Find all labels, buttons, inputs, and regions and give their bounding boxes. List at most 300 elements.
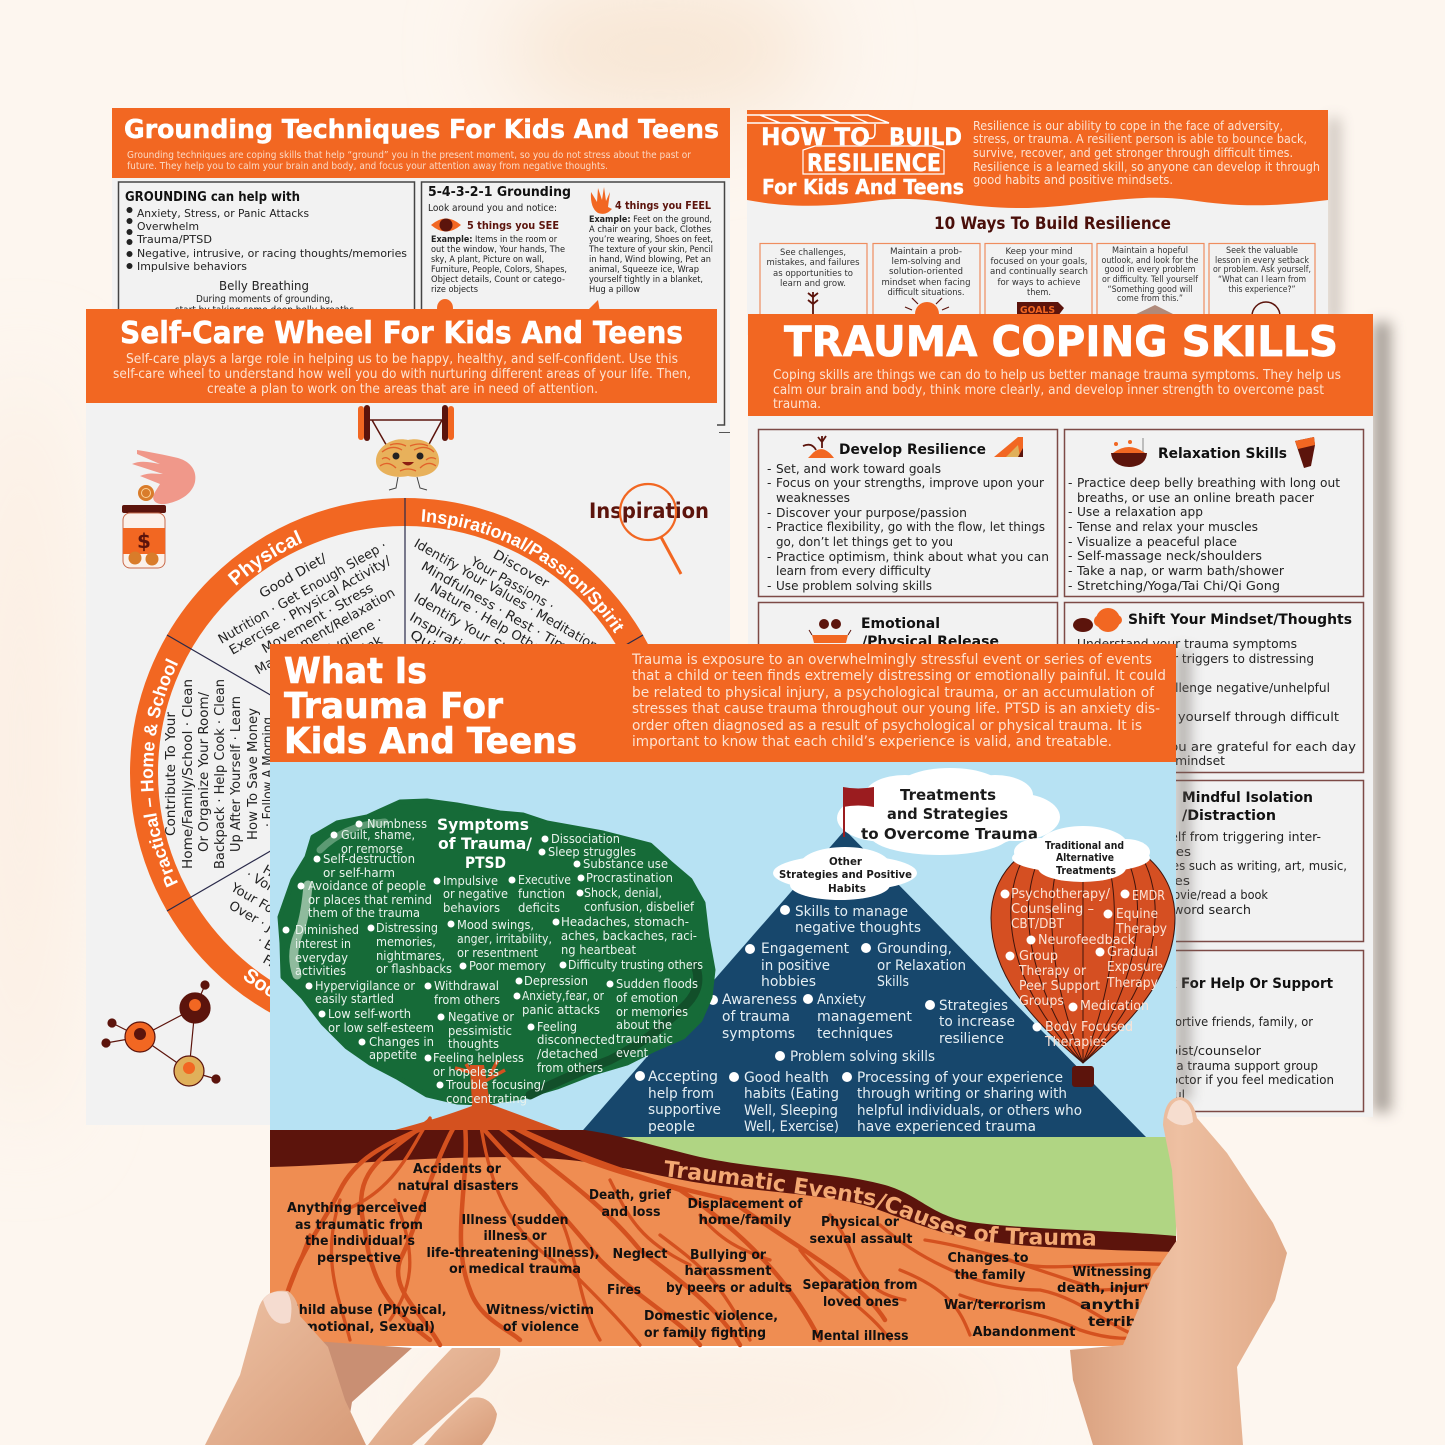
box: grounding can help with: Trauma/PTSD	[136, 233, 212, 246]
box: shift your mindset: Identify and challenge negative/unhelpful	[1077, 681, 1330, 695]
symptoms text: aches, backaches, raci-	[561, 929, 697, 943]
treatments text: Groups	[1019, 994, 1064, 1009]
symptoms text: Self-destruction	[323, 852, 415, 866]
wheel sector text: inspirational: Mindfulness · Rest · Time	[418, 559, 577, 660]
traumatic events list: natural disasters	[398, 1178, 518, 1194]
box: mindful isolation: Focus on activities such as writing, art, music,	[1077, 859, 1347, 873]
icon: hand	[591, 187, 612, 214]
wheel sector text: physical: Good Diet/	[257, 551, 330, 602]
chart: self-care wheel: Social	[244, 969, 270, 997]
box: emotional physical release: Emotional	[861, 616, 940, 632]
traumatic events list: Anything perceived	[287, 1200, 427, 1216]
what is trauma header: Kids And Teens	[284, 721, 577, 762]
strategies text: techniques	[817, 1026, 893, 1042]
strategies text: Anxiety	[817, 992, 866, 1008]
box: 5-4-3-2-1 grounding: 5 things you SEE	[467, 219, 559, 232]
symptoms text: or flashbacks	[376, 962, 452, 976]
chart: self-care wheel: Physical	[228, 530, 302, 586]
traumatic events list: Death, grief	[589, 1187, 671, 1203]
wheel sector text: inspirational	[407, 536, 600, 703]
panel: what is trauma	[270, 643, 1198, 1348]
traumatic events list: or family fighting	[644, 1325, 766, 1341]
what is trauma header: What Is	[284, 651, 427, 692]
strategies text: supportive	[648, 1102, 721, 1118]
symptoms text: activities	[295, 964, 346, 978]
icon: social network	[102, 981, 220, 1086]
wheel sector text: practical: · Follow A Morning	[261, 717, 276, 827]
resilience cards: lesson in every setback	[1215, 255, 1310, 266]
wheel sector text: physical: Exercise · Physical Activity/	[227, 553, 394, 658]
box: ask for help: Consider joining a trauma support group	[1077, 1059, 1318, 1073]
symptoms text: deficits	[518, 901, 560, 915]
traumatic events list: terrible	[1088, 1314, 1152, 1330]
box: shift your mindset: memories	[1077, 666, 1138, 680]
box: develop resilience: Develop Resilience	[839, 442, 986, 458]
symptoms text: or places that remind	[308, 893, 432, 907]
strategies text: Grounding,	[877, 941, 952, 957]
panel: grounding techniques	[112, 108, 730, 1000]
box: relaxation skills: -	[1068, 520, 1072, 534]
symptoms text: Feeling helpless	[433, 1051, 524, 1065]
resilience header: survive, recover, and get stronger through difficult times.	[973, 145, 1293, 160]
symptoms text: or low self-esteem	[328, 1021, 434, 1035]
mountain with strategies	[577, 768, 1146, 1137]
traumatic events list: death, injury or	[1057, 1280, 1173, 1296]
resilience cards: outlook, and look for the	[1102, 255, 1199, 266]
traumatic events list: Bullying or	[690, 1247, 766, 1263]
symptoms text: or hopeless	[433, 1065, 499, 1079]
traumatic events list: Physical or	[821, 1214, 899, 1230]
box: 5-4-3-2-1 grounding: 5-4-3-2-1 Grounding	[428, 185, 571, 200]
box: relaxation skills: -	[1068, 564, 1072, 578]
strategies text: in positive	[761, 958, 830, 974]
box: grounding can help with: During moments of grounding,	[196, 294, 333, 305]
box: 5-4-3-2-1 grounding: The texture of your skin, Pencil	[588, 245, 713, 255]
traumatic events list: Mental illness	[812, 1328, 908, 1344]
box: relaxation skills: -	[1068, 579, 1072, 593]
wheel sector text: inspirational: Identify Your Values · Meditation	[411, 536, 600, 654]
traumatic events list: the individual’s	[305, 1233, 415, 1249]
box: 5-4-3-2-1 grounding: Example: Feet on the ground,	[589, 215, 712, 225]
wheel sector text: physical: Water · Drink	[300, 633, 386, 691]
box: 5-4-3-2-1 grounding: rize objects	[431, 285, 478, 295]
box: ask for help: is helpful	[1130, 1088, 1185, 1102]
strategies text: of trauma	[722, 1009, 790, 1025]
cloud: traditional and alternative: Treatments	[1056, 865, 1116, 877]
strategies text: Skills	[877, 974, 909, 990]
box: shift your mindset: Shift Your Mindset/Thoughts	[1128, 612, 1352, 628]
box: grounding can help with: Anxiety, Stress, or Panic Attacks	[137, 207, 309, 220]
resilience cards: and continually search	[990, 266, 1088, 277]
traumatic events list: Illness (sudden	[462, 1212, 568, 1228]
symptoms text: or resentment	[457, 946, 538, 960]
symptoms text: Substance use	[583, 857, 668, 871]
box: develop resilience: -	[767, 579, 771, 593]
treatments text: Therapy	[1115, 922, 1167, 937]
symptoms text: or self-harm	[323, 866, 395, 880]
self-care header: create a plan to work on the areas that are in need of attention.	[207, 381, 598, 397]
symptoms text: Feeling	[537, 1020, 577, 1034]
resilience header: BUILD	[889, 123, 962, 151]
treatments text: Therapy or	[1018, 964, 1087, 979]
symptoms text: Procrastination	[586, 871, 673, 885]
symptoms text: Sudden floods	[616, 977, 698, 991]
resilience cards: or difficulty. Tell yourself	[1102, 274, 1199, 285]
symptoms text: them of the trauma	[308, 906, 420, 920]
grounding header: Grounding techniques are coping skills that help “ground” you in the present moment, so you do not stress about the past or	[127, 150, 691, 161]
strategies text: Problem solving skills	[790, 1049, 935, 1065]
coping header: trauma.	[773, 397, 821, 412]
symptoms text: Headaches, stomach-	[561, 915, 689, 929]
cloud: traditional and alternative	[1012, 826, 1150, 882]
self-care header: Self-Care Wheel For Kids And Teens	[120, 316, 683, 351]
traumatic events list: harassment	[684, 1263, 772, 1279]
strategies text: Engagement	[761, 941, 849, 957]
icon: hand and money jar: $	[137, 529, 151, 553]
box: develop resilience: -	[767, 520, 771, 534]
symptoms text: function	[518, 887, 565, 901]
bullets: treatments	[1000, 890, 1130, 1032]
resilience header: Resilience is our ability to cope in the face of adversity,	[973, 118, 1283, 133]
traumatic events list: Accidents or	[413, 1161, 501, 1177]
traumatic events list: anything	[1080, 1297, 1164, 1313]
box: shift your mindset: Understand your trauma symptoms	[1077, 637, 1297, 651]
box: shift your mindset: -	[1068, 637, 1072, 651]
symptoms text: memories,	[376, 935, 436, 949]
bullets: symptoms	[282, 820, 614, 1088]
heading: 10 ways: 10 Ways To Build Resilience	[934, 214, 1171, 234]
resilience header: Resilience is a learned skill, so anyone can develop it through	[973, 159, 1320, 174]
treatments text: Therapies	[1044, 1035, 1107, 1050]
strategies text: negative thoughts	[795, 920, 921, 936]
wheel sector text: practical: How To Save Money	[246, 708, 261, 840]
traumatic events list: Neglect	[612, 1246, 668, 1262]
symptoms text: nightmares,	[376, 949, 445, 963]
heading: symptoms: of Trauma/	[438, 834, 532, 853]
traumatic events list: Changes to	[948, 1250, 1028, 1266]
box: relaxation skills: -	[1068, 476, 1072, 490]
heading: symptoms: PTSD	[465, 853, 506, 872]
resilience header: good habits and positive mindsets.	[973, 172, 1173, 187]
box: relaxation skills: Use a relaxation app	[1077, 505, 1203, 519]
box: ask for help: Speak to your doctor if you feel medication	[1077, 1073, 1334, 1087]
box: develop resilience: learn from every difficulty	[776, 564, 931, 578]
treatments text: Psychotherapy/	[1011, 887, 1111, 902]
treatments text: Therapy	[1106, 976, 1158, 991]
strategies text	[648, 904, 1082, 1135]
wheel sector text: physical: Management/Relaxation	[253, 586, 398, 678]
icon: crane	[747, 115, 889, 138]
box: mindful isolation	[1064, 780, 1364, 942]
strategies text: Skills to manage	[795, 904, 908, 920]
box: shift your mindset: times	[1077, 725, 1111, 739]
box: grounding can help with: Negative, intrusive, or racing thoughts/memories	[137, 247, 407, 260]
resilience cards: for ways to achieve	[998, 277, 1081, 288]
box: emotional physical release: /Physical Release	[862, 634, 999, 650]
wheel sector text: social: Over · Journal	[226, 898, 310, 956]
box: ask for help: teachers	[1077, 1030, 1137, 1044]
cloud: treatments and strategies: Treatments	[900, 786, 996, 804]
symptoms text: about the	[616, 1018, 672, 1032]
box: grounding can help with: Overwhelm	[137, 220, 199, 233]
symptoms text: from others	[537, 1061, 603, 1075]
resilience header: For Kids And Teens	[762, 175, 964, 199]
box: shift your mindset: Learn to coach yourself through difficult	[1077, 710, 1339, 724]
symptoms text: /detached	[537, 1047, 598, 1061]
symptoms text: Withdrawal	[434, 979, 499, 993]
strategies text: habits (Eating	[744, 1086, 839, 1102]
coping header: calm our brain and body, think more clearly, and develop inner strength to overcome past	[773, 383, 1324, 398]
resilience cards: come from this.”	[1117, 293, 1183, 304]
wheel sector text: social: Your Focus On	[227, 880, 315, 939]
cloud: other strategies: Strategies and Positive	[779, 868, 912, 881]
treatments text: Peer Support	[1019, 979, 1100, 994]
box: 5-4-3-2-1 grounding: animal, Squeeze ice, Wrap	[589, 265, 699, 275]
box: grounding can help with	[118, 182, 414, 382]
box: shift your mindset: List 3 things you are grateful for each day	[1077, 740, 1356, 754]
heading: traumatic events: Traumatic Events/Causes of Trauma	[664, 1160, 1096, 1246]
wheel sector text: practical: Up After Yourself · Learn	[229, 696, 244, 852]
box: grounding can help with: start by taking some deep belly breaths	[175, 305, 354, 316]
symptoms text: Negative or	[448, 1010, 514, 1024]
treatments text: Group	[1019, 949, 1058, 964]
box: relaxation skills: -	[1068, 549, 1072, 563]
box: develop resilience: go, don’t let things get to you	[776, 535, 953, 549]
panel: trauma coping skills	[748, 314, 1391, 1117]
symptoms text: of emotion	[616, 991, 678, 1005]
symptoms text: behaviors	[443, 901, 500, 915]
hot air balloon with treatments	[991, 826, 1175, 1087]
box: shift your mindset: -	[1068, 652, 1072, 666]
box: relaxation skills: Take a nap, or warm bath/shower	[1076, 564, 1285, 578]
resilience cards: this experience?”	[1228, 284, 1296, 295]
strategies text: have experienced trauma	[857, 1119, 1036, 1135]
traumatic events list: Abandonment	[972, 1324, 1076, 1340]
icon: plant	[803, 436, 834, 458]
box: develop resilience: -	[767, 462, 771, 476]
box: mindful isolation: or other hobbies	[1077, 874, 1190, 888]
symptoms text: confusion, disbelief	[584, 900, 695, 914]
what is trauma header: important to know that each child’s experience is valid, and treatable.	[632, 734, 1112, 750]
box: relaxation skills: Practice deep belly breathing with long out	[1077, 476, 1340, 490]
box: mindful isolation: Watch a funny movie/read a book	[1077, 888, 1269, 902]
resilience header: RESILIENCE	[807, 149, 941, 177]
symptoms text: Changes in	[369, 1035, 434, 1049]
box: develop resilience: Focus on your strengths, improve upon your	[776, 476, 1045, 490]
box: ask for help: Talk to a therapist/counselor	[1076, 1044, 1262, 1058]
symptoms text: Depression	[524, 974, 588, 988]
wheel sector text: practical: Backpack · Help Cook · Clean	[213, 679, 228, 869]
chart: self-care wheel: Practical – Home & School	[140, 658, 178, 888]
wheel sector text: physical	[216, 538, 398, 691]
icon: hand and money jar	[122, 450, 195, 568]
symptoms text: Avoidance of people	[308, 879, 426, 893]
box: 5-4-3-2-1 grounding: out the window, Your hands, The	[431, 245, 565, 255]
box: develop resilience: -	[767, 550, 771, 564]
traumatic events list: or medical trauma	[449, 1261, 581, 1277]
box: develop resilience: Practice flexibility, go with the flow, let things	[776, 520, 1045, 534]
box: relaxation skills	[1064, 430, 1364, 596]
symptoms text: panic attacks	[522, 1003, 600, 1017]
box: develop resilience: Discover your purpose/passion	[776, 506, 967, 520]
symptoms text: or negative	[443, 887, 508, 901]
box: mindful isolation: Mindful Isolation	[1182, 790, 1313, 806]
grounding header: future. They help you to calm your brain and body, and focus your attention away from negative thoughts.	[127, 161, 608, 172]
traumatic events list	[287, 1161, 1173, 1344]
symptoms text: disconnected	[537, 1033, 615, 1047]
treatments text: Medication	[1080, 999, 1149, 1014]
strategies text: Accepting	[648, 1069, 718, 1085]
symptoms text: or memories	[616, 1005, 688, 1019]
box: mindful isolation: /Distraction	[1182, 808, 1276, 824]
symptoms text: interest in	[295, 937, 351, 951]
self-care header: Self-care plays a large role in helping us to be happy, healthy, and self-confident. Use this	[126, 351, 678, 367]
icon: lotion tube	[1295, 437, 1315, 468]
resilience cards: good in every problem	[1104, 264, 1196, 275]
panel: self-care wheel	[86, 309, 717, 1125]
symptoms text: anger, irritability,	[457, 932, 552, 946]
wheel sector text: practical: Or Organize Your Room/	[197, 691, 212, 852]
traumatic events list: Child abuse (Physical,	[290, 1302, 446, 1318]
wheel sector text: social: · Volunteer	[243, 867, 312, 916]
box: develop resilience: Practice optimism, think about what you can	[776, 550, 1049, 564]
box: 5-4-3-2-1 grounding: Hug a pillow	[589, 285, 640, 295]
box: relaxation skills: Tense and relax your muscles	[1076, 520, 1258, 534]
what is trauma header: Trauma is exposure to an overwhelmingly stressful event or series of events	[631, 652, 1152, 668]
resilience cards: as opportunities to	[773, 268, 853, 279]
box: 5-4-3-2-1 grounding: A chair on your back, Clothes	[589, 225, 711, 235]
resilience header	[747, 110, 1328, 208]
wheel sector text: inspirational: Nature · Help Others	[427, 580, 554, 663]
symptoms text: Sleep struggles	[548, 845, 636, 859]
resilience cards: difficult situations.	[888, 287, 964, 298]
what is trauma header	[270, 644, 1176, 762]
symptoms text: Shock, denial,	[584, 886, 662, 900]
strategies text: Strategies	[939, 998, 1008, 1014]
cloud: other strategies: Other	[829, 855, 863, 868]
icon: brain lifting barbell	[358, 405, 454, 490]
resilience cards: Maintain a hopeful	[1112, 245, 1188, 256]
heading: symptoms	[437, 815, 532, 872]
box: 5-4-3-2-1 grounding: in hand, Wind blowing, Pet an	[589, 255, 711, 265]
traumatic events list: life-threatening illness),	[426, 1245, 600, 1261]
strategies text: helpful individuals, or others who	[857, 1103, 1082, 1119]
symptoms text: or remorse	[341, 842, 403, 856]
what is trauma header: order often diagnosed as a result of psychological or physical trauma. It is	[632, 718, 1142, 734]
wheel sector text: inspirational: Your Passions ·	[467, 554, 557, 614]
box: develop resilience: -	[767, 476, 771, 490]
symptoms text: Diminished	[295, 923, 359, 937]
cloud: treatments and strategies: and Strategies	[887, 805, 1008, 823]
coping header	[748, 314, 1373, 416]
symptoms text: ng heartbeat	[561, 943, 636, 957]
symptoms text: appetite	[369, 1048, 417, 1062]
symptoms text: concentrating	[446, 1092, 527, 1106]
cloud: other strategies	[773, 847, 917, 900]
box: shift your mindset: -	[1068, 710, 1072, 724]
box: mindful isolation: Do a puzzle or word search	[1077, 903, 1251, 917]
strategies text: hobbies	[761, 974, 816, 990]
symptoms text: Guilt, shame,	[341, 828, 415, 842]
cloud: other strategies: Habits	[828, 882, 866, 895]
strategies text: people	[648, 1119, 695, 1135]
traumatic events list: the family	[954, 1267, 1026, 1283]
symptoms text: thoughts	[448, 1037, 499, 1051]
strategies text: help from	[648, 1086, 714, 1102]
coping header: TRAUMA COPING SKILLS	[784, 317, 1338, 366]
box: grounding can help with: GROUNDING can help with	[125, 190, 300, 205]
symptoms text: Low self-worth	[328, 1007, 411, 1021]
panel: how to build resilience	[747, 110, 1340, 335]
treatments text: Body Focused	[1045, 1020, 1133, 1035]
box: develop resilience: weaknesses	[776, 491, 850, 505]
box: 5-4-3-2-1 grounding: Furniture, People, Colors, Shapes,	[431, 265, 567, 275]
grounding header	[112, 108, 730, 178]
icon: mountain slope	[994, 437, 1023, 457]
box: 5-4-3-2-1 grounding: Object details, Count or catego-	[431, 275, 565, 285]
box: mindful isolation: Distance yourself from triggering inter-	[1077, 830, 1321, 844]
wheel sector text: inspirational: Discover	[490, 547, 552, 592]
treatments text: Neurofeedback	[1038, 933, 1135, 948]
box: shift your mindset: Understand your triggers to distressing	[1077, 652, 1314, 666]
wheel sector text: physical: Nutrition · Get Enough Sleep ·	[216, 538, 390, 647]
symptoms text: Distressing	[376, 921, 438, 935]
strategies text: management	[817, 1009, 913, 1025]
traumatic events list: Separation from	[802, 1277, 918, 1293]
strategies text: or Relaxation	[877, 958, 966, 974]
box: 5-4-3-2-1 grounding: sky, A plant, Picture on wall,	[431, 255, 544, 265]
box: shift your mindset: thoughts	[1077, 695, 1132, 709]
icon: bath	[1111, 438, 1147, 467]
box: relaxation skills: -	[1068, 535, 1072, 549]
box: relaxation skills: breaths, or use an online breath pacer	[1077, 491, 1315, 505]
traumatic events list: and loss	[602, 1204, 660, 1220]
resilience cards: learn and grow.	[780, 278, 846, 289]
box: 5-4-3-2-1 grounding: Example: Items in the room or	[431, 235, 557, 245]
traumatic events list: as traumatic from	[295, 1217, 423, 1233]
treatments text: Equine	[1116, 907, 1158, 922]
resilience cards: mistakes, and failures	[766, 257, 860, 268]
wheel sector text: practical: Contribute To Your	[164, 711, 179, 836]
traumatic events list: Emotional, Sexual)	[295, 1319, 435, 1335]
box: 5-4-3-2-1 grounding	[422, 182, 730, 433]
box: develop resilience: Use problem solving skills	[776, 579, 932, 593]
what is trauma header: stresses that cause trauma throughout our young life. PTSD is an anxiety dis-	[632, 701, 1160, 717]
wheel sector text: social	[226, 862, 335, 989]
wheel sector text: social: Friends	[260, 952, 308, 989]
cloud: treatments and strategies	[837, 768, 1060, 855]
wheel sector text: inspirational: Quiet Reflection	[407, 627, 524, 703]
cloud: treatments and strategies: to Overcome Trauma	[861, 825, 1038, 843]
strategies text: Good health	[744, 1070, 829, 1086]
wheel sector text: physical: Movement · Stress	[259, 581, 376, 657]
symptoms text: pessimistic	[448, 1024, 512, 1038]
strategies text: symptoms	[722, 1026, 795, 1042]
box: shift your mindset: -	[1068, 681, 1072, 695]
trunk and branches	[395, 1060, 560, 1130]
cloud: traditional and alternative: Alternative	[1056, 852, 1114, 864]
icon: inspiration magnifier: Inspiration	[589, 499, 709, 523]
grounding header: Grounding Techniques For Kids And Teens	[124, 115, 719, 145]
treatments text: CBT/DBT	[1011, 917, 1064, 932]
traumatic events list: sexual assault	[810, 1231, 913, 1247]
wheel sector text: social: · Be Kind	[254, 933, 312, 975]
box: 5-4-3-2-1 grounding: 4 things you FEEL	[615, 199, 711, 212]
resilience cards: mindset when facing	[882, 277, 970, 288]
box: 5-4-3-2-1 grounding: Look around you and notice:	[428, 203, 557, 214]
resilience cards: focused on your goals,	[990, 256, 1088, 267]
strategies text: through writing or sharing with	[857, 1086, 1067, 1102]
